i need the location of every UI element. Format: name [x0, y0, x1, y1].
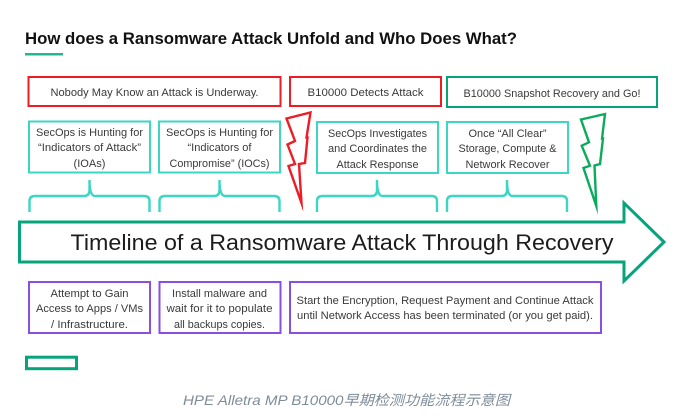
brace 1	[30, 180, 150, 212]
secops box: all clear: Once “All Clear”	[468, 128, 547, 140]
status box: detects attack	[290, 77, 441, 106]
secops box: IOCs: SecOps is Hunting for	[166, 127, 273, 139]
attack box: gain access: Access to Apps / VMs	[36, 303, 144, 315]
title: How does a Ransomware Attack Unfold and Who Does What?	[25, 29, 517, 48]
secops box: IOAs	[29, 122, 150, 172]
secops box: IOCs: “Indicators of	[188, 142, 252, 154]
status box: snapshot recovery: B10000 Snapshot Recovery and Go!	[464, 88, 640, 100]
attack box: gain access	[29, 282, 150, 333]
secops box: IOAs: “Indicators of Attack”	[38, 142, 141, 154]
attack box: encryption: until Network Access has been terminated (or you get paid).	[297, 310, 593, 322]
secops box: investigates: and Coordinates the	[328, 143, 427, 155]
secops box: IOCs: Compromise” (IOCs)	[170, 158, 270, 170]
attack box: install malware: Install malware and	[172, 288, 267, 300]
attack box: install malware: all backups copies.	[174, 319, 265, 331]
secops box: investigates	[317, 122, 438, 173]
secops box: investigates: SecOps Investigates	[328, 128, 427, 140]
timeline arrow: Timeline of a Ransomware Attack Through Recovery	[70, 230, 614, 255]
attack box: encryption	[290, 282, 601, 333]
secops box: all clear	[447, 122, 568, 173]
status box: snapshot recovery	[447, 77, 657, 107]
secops box: all clear: Network Recover	[466, 159, 550, 171]
brace 4	[447, 180, 567, 212]
logo	[26, 357, 76, 369]
caption: HPE Alletra MP B10000早期检测功能流程示意图	[183, 392, 512, 408]
attack box: install malware	[160, 282, 280, 333]
status box: nobody knows	[28, 77, 280, 106]
attack box: gain access: Attempt to Gain	[50, 288, 128, 300]
secops box: all clear: Storage, Compute &	[458, 143, 557, 155]
red lightning bolt	[286, 112, 310, 203]
secops box: IOAs: SecOps is Hunting for	[36, 127, 143, 139]
secops box: IOCs	[159, 122, 280, 172]
title underline	[25, 53, 63, 56]
status box: detects attack: B10000 Detects Attack	[308, 87, 424, 99]
timeline arrow	[20, 203, 664, 281]
secops box: investigates: Attack Response	[336, 159, 418, 171]
attack box: gain access: / Infrastructure.	[51, 319, 128, 331]
brace 2	[160, 180, 280, 212]
brace 3	[317, 180, 437, 212]
attack box: install malware: wait for it to populate	[165, 303, 272, 315]
green lightning bolt	[581, 114, 605, 206]
attack box: encryption: Start the Encryption, Request Payment and Continue Attack	[296, 295, 594, 307]
secops box: IOAs: (IOAs)	[74, 158, 106, 170]
status box: nobody knows: Nobody May Know an Attack is Underway.	[50, 87, 258, 99]
